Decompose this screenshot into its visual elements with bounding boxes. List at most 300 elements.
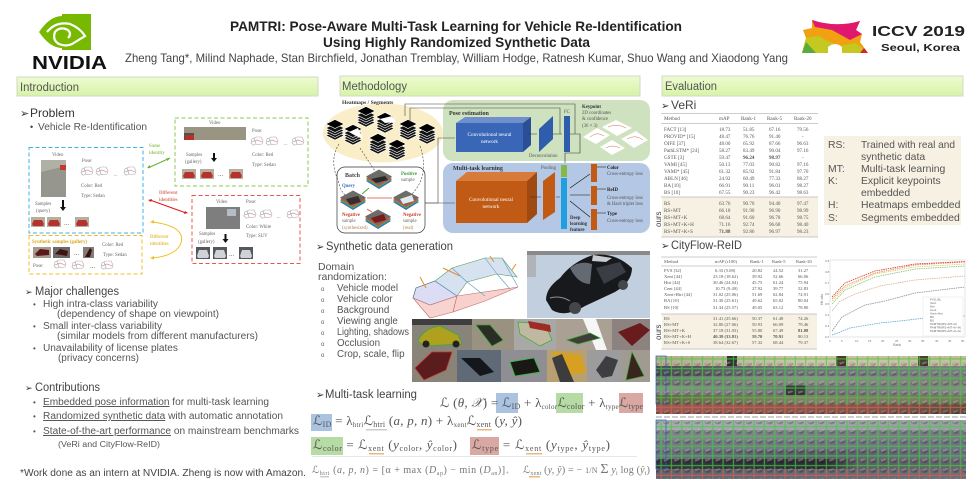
table: VeRi results: 97.47 (797, 201, 809, 207)
legend: method abbreviations: MT: (828, 164, 845, 175)
text block: Major challenges: Unavailability of license plates (43, 343, 178, 354)
table: VeRi results: 48.00 (719, 141, 731, 147)
table: CityFlow-ReID results: 23.18 (18.62) (713, 274, 738, 279)
text block: Synthetic data generation: Vehicle color (337, 294, 393, 305)
text block: Major challenges: (dependency of shape on viewpoint) (57, 309, 219, 320)
table: CityFlow-ReID results: RS+MT+K+H (664, 334, 692, 339)
diagram: PAMTRI architecture (323, 100, 650, 233)
type loss: , (574, 437, 582, 452)
type loss: type (589, 444, 605, 453)
legend: method abbreviations: Heatmaps embedded (861, 200, 961, 211)
table: VeRi results: VAMI* [45] (664, 169, 690, 175)
table: VeRi results: PathLSTM* [24] (664, 148, 699, 154)
color loss: ( (384, 437, 393, 452)
heading: Evaluation: Evaluation (665, 81, 717, 93)
table: CityFlow-ReID results: 80.13 (798, 334, 809, 339)
panel: batch: sample (342, 219, 356, 224)
legend: method abbreviations: Segments embedded (861, 213, 960, 224)
panel: pose estimation: Convolutional neural (468, 132, 512, 138)
equations: loss functions (311, 393, 650, 478)
table: VeRi results: 96.90 (769, 208, 781, 214)
chart: CMC curves: 5 (841, 339, 843, 343)
different identity gallery group: Samples (199, 232, 215, 237)
arrow: different identities red: identities (159, 198, 178, 203)
table: CityFlow-ReID results: 40.39 (33.81) (713, 334, 738, 339)
overall loss: color (567, 402, 585, 411)
cross-entropy loss: log ( (618, 465, 641, 476)
overall loss: color (542, 403, 558, 411)
type loss: ) (606, 437, 610, 452)
arrow: different identities red (148, 191, 188, 214)
panel: batch: sample (403, 219, 417, 224)
chart: CMC curves: Xent (930, 301, 936, 305)
logo: NVIDIA (32, 14, 107, 73)
text block: Major challenges: • (33, 344, 36, 353)
text block: Major challenges: Small inter-class variability (43, 321, 162, 332)
overall loss: + λ (585, 395, 606, 410)
table: CityFlow-ReID results: 31.34 (25.57) (713, 305, 738, 310)
table: VeRi results: 98.99 (797, 208, 809, 214)
cross-entropy loss: ℒ (523, 465, 530, 476)
table: CityFlow-ReID results: 30.46 (24.04) (713, 280, 738, 285)
panel: batch: Query (342, 184, 356, 189)
text block: Major challenges: • (33, 322, 36, 331)
panel: multi-task learning: ReID (607, 188, 618, 193)
table: CityFlow-ReID results: Method (664, 259, 679, 264)
table: CityFlow-ReID results: Xent+Htri [44] (664, 292, 692, 297)
table: CityFlow-ReID results: 37.18 (31.03) (713, 328, 738, 333)
color loss: color (323, 444, 342, 453)
overall loss: type (628, 402, 643, 411)
text block: Synthetic data generation: o (321, 320, 325, 326)
table: CityFlow-ReID results: 24.52 (773, 268, 784, 273)
text block: Synthetic data generation: o (321, 342, 325, 348)
table: CityFlow-ReID results: 70.91 (773, 334, 784, 339)
table: CityFlow-ReID results (654, 257, 817, 349)
highlight blocks (311, 393, 643, 478)
table: CityFlow-ReID results: 63.12 (773, 305, 784, 310)
overall loss: + λ (521, 395, 542, 410)
chart: CMC curves: 0.9 (825, 259, 830, 263)
same identity gallery group: Samples (186, 153, 202, 158)
heatmaps and segments ellipse: Heatmaps / Segments (342, 100, 394, 106)
text block: Synthetic data generation: Domain (318, 261, 354, 273)
table: VeRi results: 94.40 (769, 201, 781, 207)
chart: CMC curves: 50 (961, 339, 965, 343)
table: CityFlow-ReID results: 61.48 (773, 316, 784, 321)
table: CityFlow-ReID results: 31.30 (25.61) (713, 298, 738, 303)
text block: Problem: Vehicle Re-Identification (38, 121, 147, 133)
table: VeRi results: 66.91 (719, 183, 731, 189)
text block: Major challenges: • (33, 300, 36, 309)
heading: VeRi: VeRi (671, 98, 696, 112)
logo: NVIDIA: NVIDIA (32, 53, 107, 73)
same identity gallery group: Type: Sedan (252, 163, 276, 168)
table: VeRi results: 59.47 (719, 155, 731, 161)
text block: Synthetic data generation: Crop, scale, flip (337, 349, 405, 360)
ID loss: xent (454, 421, 466, 429)
table: CityFlow-ReID results: RS+MT (664, 322, 679, 327)
query video group: Pose: (82, 159, 92, 164)
different identity gallery group: Video (216, 200, 228, 205)
table: VeRi results: mAP (719, 116, 730, 122)
chart: CMC curves: PAMTRI(RS+MT+K+S) (930, 329, 961, 333)
overall loss: type (606, 403, 619, 411)
chart: CMC curves: 0.5 (825, 302, 830, 306)
table: CityFlow-ReID results: RS (664, 316, 670, 321)
table: VeRi results: 63.76 (719, 201, 731, 207)
chart: CMC curves: Hit rate (820, 294, 824, 305)
text block: Problem: ➢ (20, 108, 29, 120)
table: VeRi results: 88.27 (797, 176, 809, 182)
table: CityFlow-ReID results: 45.75 (752, 280, 763, 285)
table: CityFlow-ReID results: 79.46 (798, 322, 809, 327)
table: CityFlow-ReID results: 67.49 (773, 328, 784, 333)
table: VeRi results: 24.92 (719, 176, 731, 182)
image grid: top retrieval results (656, 356, 966, 417)
table: CityFlow-ReID results: 74.91 (798, 292, 809, 297)
text block: Major challenges: High intra-class variability (43, 299, 158, 310)
chart: CMC curves: Rank (893, 343, 901, 347)
table: VeRi results: 90.04 (769, 148, 781, 154)
table: VeRi results: BS [10] (664, 190, 680, 196)
table: CityFlow-ReID results: mAP (r100) (715, 259, 737, 264)
table: VeRi results: 90.70 (743, 201, 755, 207)
text block: Synthetic data generation: Background (337, 305, 389, 316)
title (230, 18, 682, 50)
text block: Problem: • (30, 122, 33, 132)
cross-entropy loss: ) (647, 465, 650, 476)
panel: batch: Batch (345, 173, 361, 179)
type loss: xent (525, 444, 542, 453)
table: VeRi results: 98.23 (797, 229, 809, 235)
different identity gallery group: ... (229, 250, 234, 258)
triplet loss: ) − min ( (443, 465, 484, 476)
chart: CMC curves: Htri (930, 304, 935, 308)
synthetic gallery group (29, 236, 142, 274)
different identity gallery group: Color: White (246, 225, 271, 230)
table: CityFlow-ReID results: 80.04 (798, 298, 809, 303)
ID loss: ℒ (313, 414, 322, 429)
legend: method abbreviations: Trained with real and (861, 140, 955, 151)
image: synthetic sample collage (412, 319, 650, 382)
panel: multi-task learning: Convolutional neural (469, 197, 514, 203)
ID loss: ( (491, 413, 499, 428)
legend: method abbreviations: Explicit keypoints (861, 176, 941, 187)
table: VeRi results: 60.49 (743, 176, 755, 182)
table: VeRi results: 96.42 (769, 190, 781, 196)
table: VeRi results: OIFE [37] (664, 141, 685, 147)
table: CityFlow-ReID results: 10.73 (9.49) (715, 286, 738, 291)
table: VeRi results: 50.13 (719, 162, 731, 168)
panel: batch: sample (401, 178, 415, 183)
panel: pose estimation: FC (564, 110, 570, 115)
type loss: ℒ (472, 438, 481, 453)
chart: CMC curves: 35 (921, 339, 925, 343)
text block: Major challenges: ➢ (25, 287, 33, 297)
query video group (29, 148, 143, 233)
text block: Synthetic data generation: o (321, 309, 325, 315)
panel: pose estimation: Keypoint (582, 105, 601, 110)
table: VeRi results: 91.84 (769, 169, 781, 175)
overall loss: ℒ (θ, 𝒳) = ℒ (440, 395, 511, 411)
chart: CMC curves: 0.8 (825, 270, 830, 274)
heading: Introduction: Introduction (20, 82, 79, 94)
table: VeRi results: - (802, 134, 804, 140)
ID loss: a, p, n) + λ (394, 413, 453, 428)
color loss: = (342, 437, 358, 452)
table: CityFlow-ReID results: 61.24 (773, 280, 784, 285)
panel: multi-task learning: Color (607, 166, 620, 171)
chart: CMC curves: 20 (881, 339, 885, 343)
query video group: ... (64, 219, 70, 227)
table: CityFlow-ReID results: 75.94 (798, 280, 809, 285)
text block: Major challenges: (similar models from different manufacturers) (57, 331, 258, 342)
chart: CMC curves: Xent+Htri (930, 312, 943, 316)
table: VeRi results: 92.74 (743, 222, 755, 228)
table: CityFlow-ReID results: 27.92 (752, 286, 763, 291)
same identity gallery group: ... (284, 142, 288, 147)
triplet loss: ( (330, 465, 337, 476)
ID loss: ID (323, 420, 332, 429)
text block: Multi-task learning heading: ➢ (316, 390, 324, 401)
panel: pose estimation: & confidence (582, 117, 608, 122)
text block: Contributions: ➢ (25, 383, 33, 393)
table: VeRi results: 87.66 (769, 141, 781, 147)
text block: Synthetic data generation: ➢ (316, 242, 324, 253)
table: VeRi results: 91.90 (743, 208, 755, 214)
color loss: ŷ (425, 437, 433, 452)
table: VeRi results: RS (664, 201, 670, 207)
table: CityFlow-ReID results: 50.37 (752, 316, 763, 321)
table: CityFlow-ReID results: Xent [44] (664, 274, 682, 279)
text block: Synthetic data generation: Vehicle model (337, 283, 398, 294)
chart: CMC curves: BA (930, 315, 934, 319)
table: VeRi results: 51.85 (743, 127, 755, 133)
table: VeRi results: 98.75 (797, 215, 809, 221)
diagram: re-identification examples (29, 118, 308, 274)
table: VeRi results: ours (654, 211, 663, 227)
ID loss: = λ (332, 413, 353, 428)
logo: ICCV 2019: Seoul, Korea (881, 43, 961, 54)
type loss: type (558, 444, 574, 453)
same identity gallery group: Color: Red (252, 153, 274, 158)
table: CityFlow-ReID results: 55.80 (752, 328, 763, 333)
image: rendered black sedan (527, 251, 650, 318)
text block: Synthetic data generation: Lighting, shadows (337, 327, 409, 338)
same identity gallery group (175, 118, 308, 186)
arrow: same identity (147, 144, 170, 168)
color loss: ℒ (313, 438, 322, 453)
chart: CMC curves: 45 (948, 339, 952, 343)
table: CityFlow-ReID results: BS [10] (664, 305, 679, 310)
chart: CMC curves: 30 (908, 339, 912, 343)
table: CityFlow-ReID results: Htri [44] (664, 280, 681, 285)
logo: ICCV 2019: ICCV 2019 (872, 23, 965, 40)
table: VeRi results: 79.56 (797, 127, 809, 133)
table: CityFlow-ReID results: 39.92 (752, 274, 763, 279)
table: VeRi results: 96.68 (769, 222, 781, 228)
cross-entropy loss: ŷ (639, 465, 645, 476)
text block: Synthetic data generation: o (321, 353, 325, 359)
query video group: ... (114, 173, 118, 178)
table: VeRi results: 96.01 (769, 183, 781, 189)
color loss: y (391, 437, 399, 452)
query video group: (query) (36, 209, 51, 214)
table: VeRi results: 61.32 (719, 169, 731, 175)
table: CityFlow-ReID results: 49.62 (752, 298, 763, 303)
ID loss: htri (353, 421, 363, 429)
legend: method abbreviations: K: (828, 176, 838, 187)
different identity gallery group: ... (277, 215, 281, 220)
table: VeRi results: Rank-20 (794, 116, 812, 122)
heading: Introduction (17, 77, 318, 96)
legend: method abbreviations: synthetic data (861, 152, 925, 163)
chart: CMC curves: 25 (895, 339, 899, 343)
text block: Problem: Problem (30, 106, 75, 120)
legend: method abbreviations: Multi-task learning (861, 164, 946, 175)
table: VeRi results: 71.88 (719, 229, 731, 235)
ID loss: ℒ (467, 414, 476, 429)
overall loss: ID (512, 402, 520, 411)
cross-entropy loss: y, ŷ) = − 1/N Σ y (548, 462, 616, 477)
color loss: ) (453, 437, 457, 452)
table: VeRi results: 77.33 (769, 176, 781, 182)
panel: multi-task learning: & Hard triplet loss (607, 202, 643, 207)
table: CityFlow-ReID results: 68.44 (773, 340, 784, 345)
text block: Problem (20, 106, 147, 133)
same identity gallery group: ... (218, 170, 224, 178)
table: VeRi results: RS+MT+K+S (664, 229, 693, 235)
synthetic gallery group: Color: Red (102, 243, 124, 248)
overall loss: ℒ (619, 396, 628, 411)
text block: Major challenges (25, 286, 258, 364)
table: VeRi results: PROVID* [15] (664, 134, 696, 140)
table: VeRi results: 58.27 (719, 148, 731, 154)
table: VeRi results: GSTE [3] (664, 155, 684, 161)
text block: Synthetic data generation: Occlusion (337, 338, 380, 349)
table: VeRi results: Rank-5 (767, 116, 782, 122)
text block: Contributions: • (33, 398, 36, 407)
triplet loss: htri (320, 471, 330, 477)
panel: multi-task learning: Type (607, 212, 617, 217)
arrow: same identity: identity (149, 151, 165, 156)
table: CityFlow-ReID results: 78.80 (798, 305, 809, 310)
triplet loss: D (482, 465, 491, 476)
chart: CMC curves: PAMTRI(RS+MT+K+H) (930, 326, 961, 330)
triplet loss: a, p, n) = [α + max (D (337, 465, 436, 476)
synthetic gallery group: Synthetic samples (gallery) (32, 240, 88, 245)
text block: Contributions: (VeRi and CityFlow-ReID) (58, 440, 160, 449)
title: PAMTRI: Pose-Aware Multi-Task Learning for Vehicle Re-Identification (230, 18, 682, 34)
chart: CMC curves: 10 (855, 339, 859, 343)
query video group: Color: Red (81, 184, 103, 189)
table: VeRi results: 96.78 (769, 215, 781, 221)
synthetic gallery group: ... (90, 262, 96, 270)
different identity gallery group: Pose: (246, 200, 256, 205)
ID loss: ( (385, 413, 393, 428)
panel: batch: Negative (342, 213, 360, 218)
heading: Evaluation (662, 76, 963, 96)
table: VeRi results: 97.16 (797, 162, 809, 168)
table: VeRi results: 65.92 (743, 141, 755, 147)
table: CityFlow-ReID results: 66.06 (798, 274, 809, 279)
panel: multi-task learning (443, 163, 650, 233)
table: VeRi results: 96.24 (743, 155, 755, 161)
color loss: color (400, 444, 419, 453)
text block: Synthetic data generation: randomization: (318, 271, 387, 283)
image grid: bottom retrieval results (656, 420, 966, 479)
panel: pose estimation: (36 × 3) (582, 124, 598, 129)
heading: CityFlow-ReID: CityFlow-ReID (671, 238, 742, 252)
table: CityFlow-ReID results: 38.64 (32.67) (713, 340, 738, 345)
table: CityFlow-ReID results: 57.32 (752, 340, 763, 345)
table: CityFlow-ReID results: FVS [32] (664, 268, 682, 273)
table: VeRi results: 92.86 (743, 229, 755, 235)
table: VeRi results: 96.97 (769, 229, 781, 235)
table: CityFlow-ReID results: Rank-1 (750, 259, 764, 264)
table: VeRi results: 18.73 (719, 127, 731, 133)
table: VeRi results: 83.49 (743, 148, 755, 154)
text block: Multi-task learning heading: Multi-task learning (325, 389, 417, 401)
panel: batch: (real) (403, 226, 414, 231)
text block: Major challenges: Major challenges (35, 286, 119, 298)
panel: pose estimation: Deconvolution (529, 154, 558, 159)
legend: method abbreviations: S: (828, 213, 838, 224)
chart: CMC curves: Cent (930, 308, 937, 312)
table: VeRi results: 67.16 (769, 127, 781, 133)
table: VeRi results: 85.92 (743, 169, 755, 175)
same identity gallery group: Video (209, 121, 221, 126)
color loss: ℒ (358, 438, 368, 453)
table: VeRi results: 48.47 (719, 134, 731, 140)
different identity gallery group: (gallery) (198, 240, 215, 245)
overall loss: ℒ (557, 396, 567, 411)
legend: method abbreviations: RS: (828, 140, 845, 151)
chart: CMC curves: FVS_BL (930, 298, 942, 302)
text block: Synthetic data generation: Synthetic data generation (326, 239, 453, 253)
authors: Zheng Tang*, Milind Naphade, Stan Birchfield, Jonathan Tremblay, William Hodge, Ratnesh Kumar, Shuo Wang and Xiaodong Yang (125, 51, 788, 65)
heading: CityFlow-ReID: ➢ (661, 241, 669, 252)
heading: Methodology: Methodology (342, 81, 407, 93)
text block: Synthetic data generation: o (321, 287, 325, 293)
table: CityFlow-ReID results: 49.05 (752, 305, 763, 310)
table: VeRi results: 91.60 (743, 215, 755, 221)
table: CityFlow-ReID results: Rank-5 (772, 259, 786, 264)
cross-entropy loss: i (645, 471, 647, 477)
legend: method abbreviations (824, 136, 961, 225)
text block: Contributions: • (33, 427, 36, 436)
text block: Contributions: State-of-the-art performance on mainstream benchmarks (43, 426, 299, 437)
ID loss: ℒ (364, 414, 373, 429)
table: VeRi results: Method (664, 116, 680, 122)
table: CityFlow-ReID results: 79.37 (798, 340, 809, 345)
ID loss: y, ŷ) (499, 413, 522, 428)
table: VeRi results: 98.27 (797, 183, 809, 189)
cross-entropy loss: ( (541, 465, 548, 476)
table: VeRi results: 90.82 (769, 162, 781, 168)
query video group: Samples (35, 202, 51, 207)
table: CityFlow-ReID results: 31.27 (798, 268, 809, 273)
table: CityFlow-ReID results: 52.83 (798, 286, 809, 291)
cross-entropy loss: xent (530, 471, 542, 477)
chart: CMC curves (820, 259, 965, 347)
same identity gallery group: (gallery) (185, 160, 202, 165)
arrow: different identities red: Different (159, 191, 178, 196)
panel: pose estimation: 2D coordinates (582, 111, 611, 116)
table: CityFlow-ReID results: 51.69 (752, 292, 763, 297)
table: CityFlow-ReID results: Rank-20 (796, 259, 813, 264)
